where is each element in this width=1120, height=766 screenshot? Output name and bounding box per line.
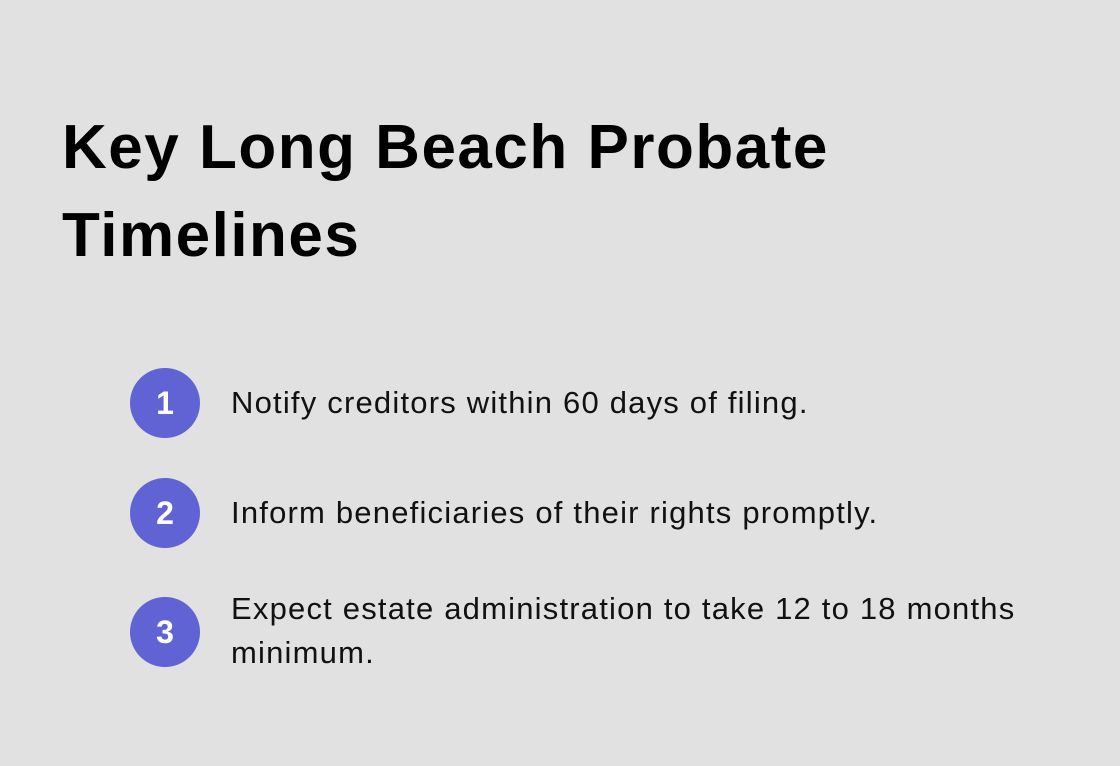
badge 2 [130, 478, 200, 548]
title [62, 113, 829, 270]
title: Key Long Beach Probate [62, 113, 829, 182]
text 2: Inform beneficiaries of their rights promptly. [231, 495, 878, 530]
badge 2: 2 [156, 495, 174, 531]
badge 3 [130, 597, 200, 667]
title: Timelines [62, 201, 360, 270]
text 3: Expect estate administration to take 12 to 18 months [231, 591, 1015, 626]
badge 3: 3 [156, 614, 174, 650]
item 2 [130, 478, 878, 548]
item 3 [130, 591, 1015, 670]
badge 1: 1 [156, 385, 174, 421]
text 3: minimum. [231, 635, 375, 670]
text 1: Notify creditors within 60 days of filing. [231, 385, 809, 420]
item 1 [130, 368, 809, 438]
badge 1 [130, 368, 200, 438]
text 3 [231, 591, 1015, 670]
